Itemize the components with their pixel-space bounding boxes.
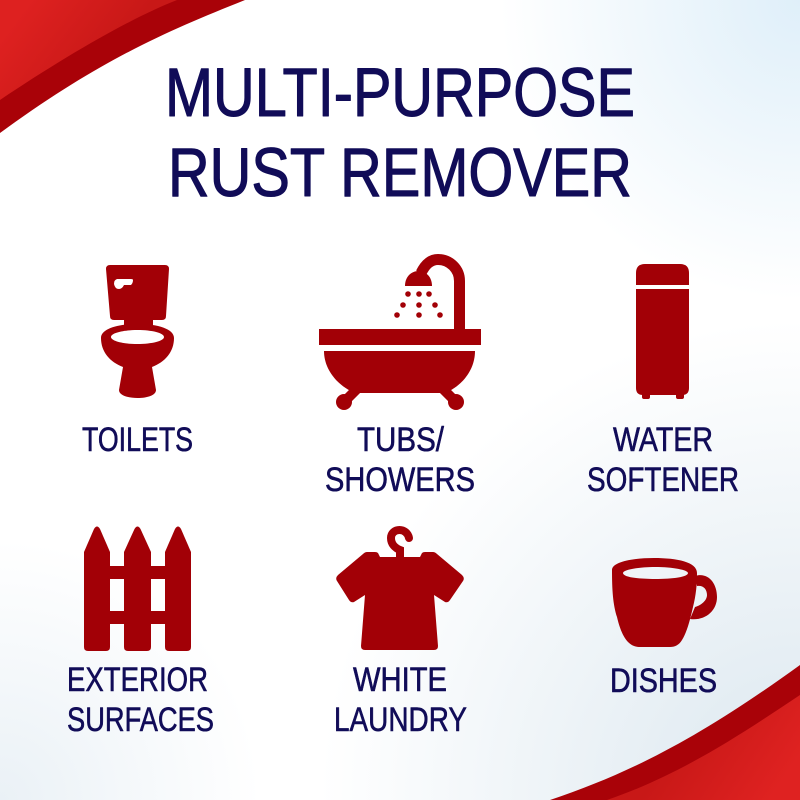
label: tubs / showers: TUBS/ xyxy=(357,421,444,459)
label: exterior surfaces: EXTERIOR xyxy=(67,661,208,699)
label: white laundry: LAUNDRY xyxy=(334,701,467,739)
icon: t-shirt on hanger xyxy=(336,530,464,650)
title: RUST REMOVER xyxy=(168,134,632,211)
swoosh: top-left red corner xyxy=(0,0,245,133)
icon: bathtub with shower xyxy=(319,260,481,410)
swoosh: bottom-right red corner xyxy=(550,665,800,800)
label: toilets: TOILETS xyxy=(82,421,193,459)
label: tubs / showers xyxy=(325,421,475,499)
label: exterior surfaces xyxy=(67,661,214,739)
label: exterior surfaces: SURFACES xyxy=(67,701,214,739)
label: water softener: WATER xyxy=(613,421,713,459)
icon: picket fence xyxy=(84,526,191,651)
icon: cup xyxy=(612,558,717,647)
label: water softener: SOFTENER xyxy=(587,461,739,499)
label: white laundry xyxy=(334,661,467,739)
icon: toilet xyxy=(101,265,174,398)
label: white laundry: WHITE xyxy=(353,661,447,699)
icon: water softener xyxy=(636,264,689,399)
label: tubs / showers: SHOWERS xyxy=(325,461,475,499)
label: dishes: DISHES xyxy=(610,662,717,700)
title: MULTI-PURPOSE xyxy=(165,54,635,131)
label: water softener xyxy=(587,421,739,499)
title xyxy=(165,54,635,211)
